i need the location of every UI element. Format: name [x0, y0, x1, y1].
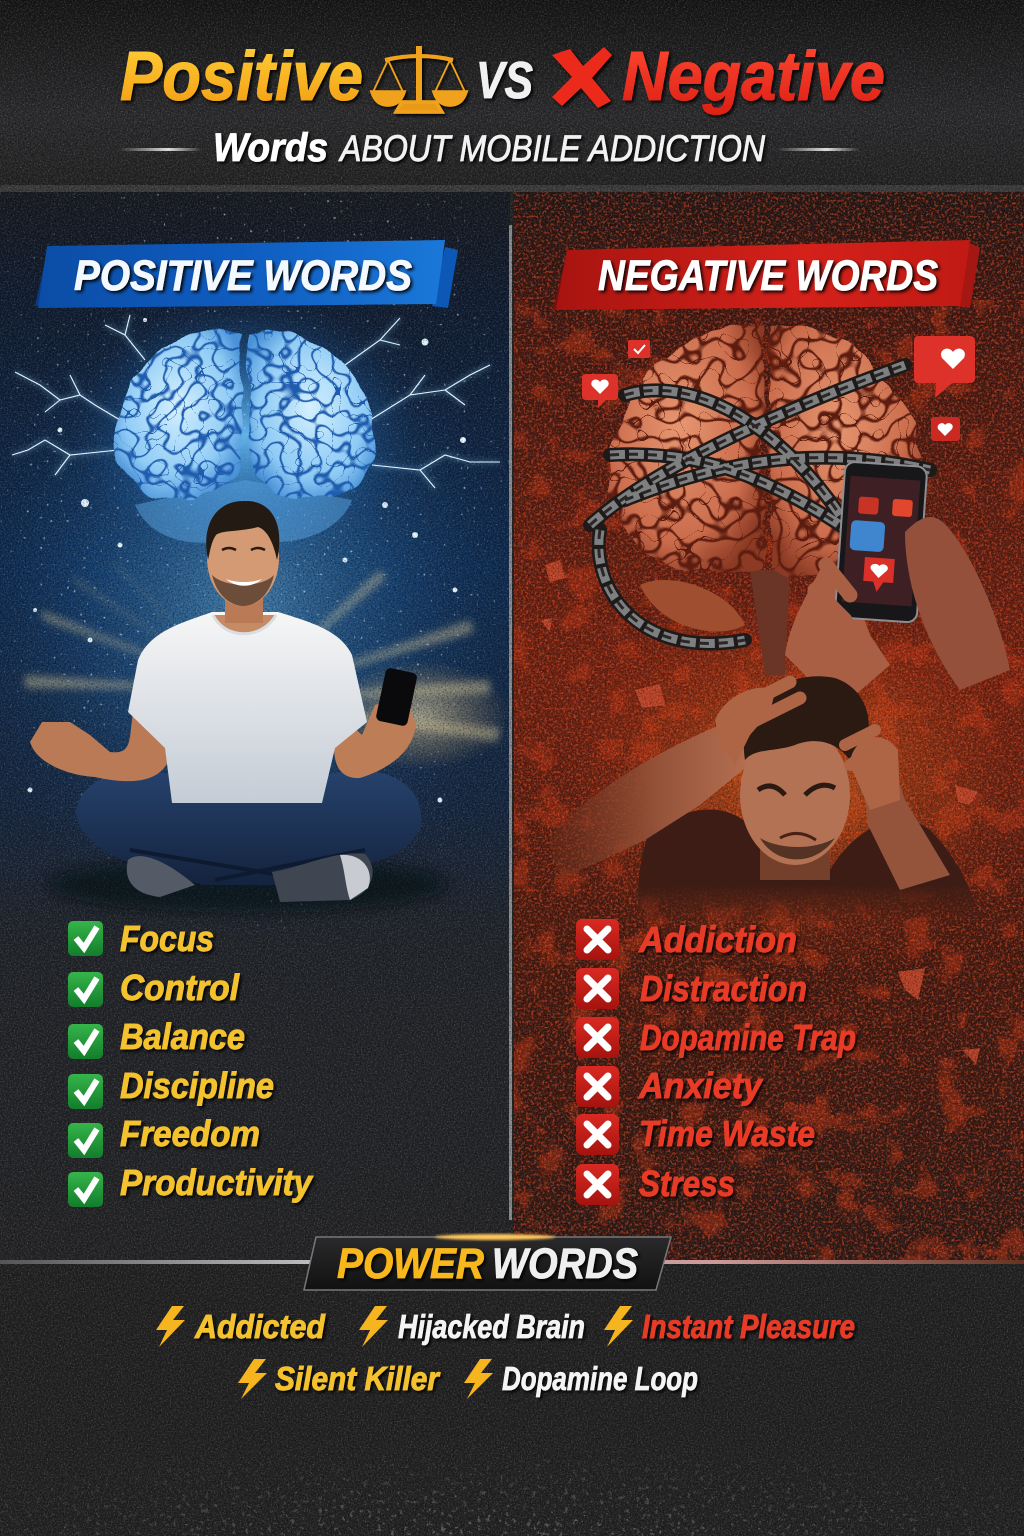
- panel: header background: [0, 0, 1024, 190]
- item: Control: [68, 967, 240, 1008]
- item: Freedom: [68, 1113, 260, 1158]
- power word: Silent Killer: Silent Killer: [275, 1360, 441, 1397]
- item: Freedom: Freedom: [120, 1113, 260, 1154]
- power word: Hijacked Brain: Hijacked Brain: [398, 1308, 585, 1345]
- arms: [30, 708, 172, 781]
- power word: Addicted: [156, 1306, 326, 1347]
- power word: Dopamine Loop: [464, 1359, 698, 1399]
- illustration: meditating man with phone: [30, 501, 448, 913]
- power word: Instant Pleasure: Instant Pleasure: [642, 1308, 855, 1345]
- item: Discipline: [68, 1065, 274, 1109]
- power word: Instant Pleasure: [604, 1306, 855, 1347]
- ember shards: [540, 560, 1000, 1064]
- shirt: [128, 612, 367, 803]
- power word: Hijacked Brain: [359, 1306, 585, 1347]
- illustration: stressed man: [548, 676, 985, 925]
- subtitle: [118, 126, 860, 170]
- header rule: [0, 185, 1024, 192]
- list: positive words: [68, 918, 314, 1207]
- banner: positive words: [35, 240, 458, 308]
- panel: positive side background: [0, 192, 510, 982]
- item: Focus: Focus: [120, 918, 214, 959]
- item: Balance: [68, 1016, 245, 1059]
- icon: red X: [552, 47, 612, 108]
- panel: negative side background: [514, 192, 1024, 1260]
- item: Dopamine Trap: [576, 1017, 856, 1058]
- panel: footer background: [0, 1449, 1024, 1536]
- legs: [76, 770, 421, 885]
- icon: balance scale: [372, 46, 466, 112]
- item: Distraction: Distraction: [640, 968, 807, 1009]
- banner: power words: POWER: [337, 1240, 484, 1288]
- power words section: [0, 1234, 1024, 1399]
- title: [120, 37, 885, 115]
- item: Time Waste: Time Waste: [639, 1113, 815, 1154]
- head: [760, 840, 830, 880]
- shirt: [638, 810, 985, 925]
- item: Anxiety: Anxiety: [638, 1065, 764, 1106]
- item: Balance: Balance: [120, 1016, 245, 1057]
- large stars: [28, 318, 466, 802]
- item: Dopamine Trap: Dopamine Trap: [640, 1017, 856, 1058]
- banner: positive words: POSITIVE WORDS: [74, 252, 412, 300]
- hands on head: [715, 688, 775, 765]
- subtitle: ABOUT MOBILE ADDICTION: [338, 128, 765, 169]
- title word: VS: VS: [476, 52, 533, 110]
- item: Stress: [576, 1163, 735, 1205]
- head: [225, 585, 263, 623]
- arms: [548, 700, 770, 880]
- item: Control: Control: [120, 967, 240, 1008]
- item: Addiction: Addiction: [638, 919, 797, 960]
- shoes: [127, 856, 195, 897]
- item: Discipline: Discipline: [120, 1065, 274, 1106]
- power word: Addicted: Addicted: [194, 1308, 326, 1345]
- banner: power words: [304, 1234, 671, 1290]
- illustration: chained brain: [590, 326, 930, 675]
- banner: negative words: [553, 240, 980, 310]
- item: Anxiety: [576, 1065, 764, 1107]
- warm light rays: [25, 560, 510, 770]
- title word: Negative: Negative: [622, 37, 885, 115]
- centre divider: [509, 225, 512, 1220]
- icons: social notification bubbles: [582, 336, 975, 441]
- orange glow: [550, 590, 1024, 970]
- item: Productivity: Productivity: [120, 1162, 314, 1203]
- illustration: hands holding phone: [785, 461, 1010, 695]
- star field: [0, 192, 510, 992]
- item: Addiction: [576, 919, 797, 960]
- fine ember speckle: [514, 192, 1024, 1260]
- item: Focus: [68, 918, 214, 959]
- list: negative words: [576, 919, 856, 1205]
- phone: [375, 667, 418, 727]
- subtitle: Words: [213, 126, 328, 170]
- item: Time Waste: [576, 1113, 815, 1155]
- banner: power words: WORDS: [492, 1240, 638, 1288]
- title word: Positive: Positive: [120, 37, 363, 115]
- illustration: glowing brain: [12, 295, 500, 575]
- banner: negative words: NEGATIVE WORDS: [598, 252, 938, 300]
- power word: Dopamine Loop: Dopamine Loop: [502, 1360, 698, 1397]
- footer pebble speckle: [0, 1449, 1024, 1536]
- blue radial glow: [0, 260, 525, 940]
- chains: [590, 365, 930, 643]
- item: Stress: Stress: [639, 1163, 735, 1204]
- item: Distraction: [576, 968, 807, 1009]
- ember texture: [514, 300, 1024, 1260]
- item: Productivity: [68, 1162, 314, 1207]
